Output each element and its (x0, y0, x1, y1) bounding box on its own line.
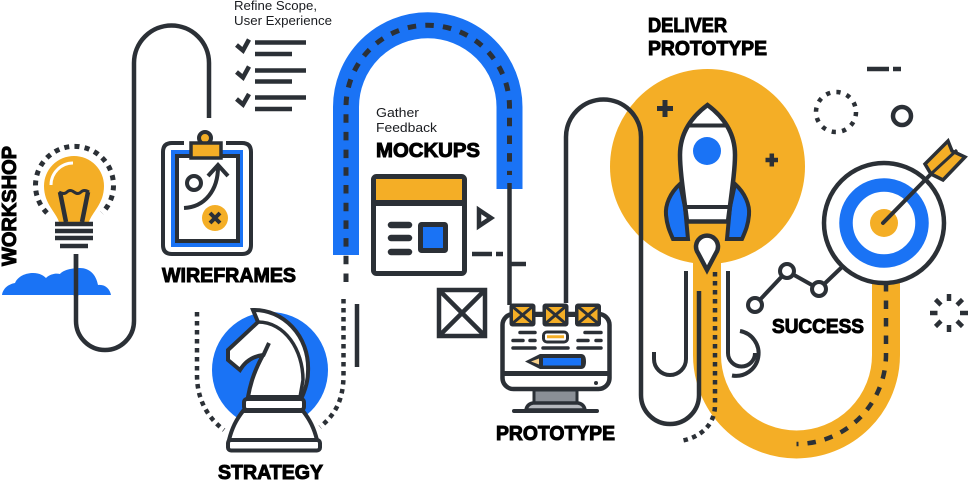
bulb glass (44, 156, 104, 222)
stand foot (526, 403, 585, 410)
filament top (59, 190, 89, 194)
blue arch road (346, 25, 510, 255)
clipboard frame (163, 143, 251, 254)
dotted circle (816, 92, 856, 132)
deliver prototype label: DELIVER (648, 15, 728, 37)
text lines (391, 225, 409, 252)
orange U-shaped road (707, 255, 886, 444)
mockups label: MOCKUPS (376, 140, 480, 162)
blue backing (171, 150, 243, 247)
arrow shaft (883, 175, 930, 223)
outer ring (824, 163, 944, 283)
icon: browser window (373, 176, 465, 274)
plus small (766, 154, 778, 166)
icon: monitor (501, 304, 611, 411)
x mark (210, 213, 220, 223)
clip loop (199, 132, 211, 144)
cone and band lines (685, 126, 730, 207)
x tile two (542, 304, 568, 326)
window frame (374, 176, 464, 274)
play circle (187, 176, 201, 190)
bullseye (870, 209, 898, 237)
icon: lightbulb on cloud (2, 146, 114, 296)
success label: SUCCESS (772, 316, 864, 338)
power dot (594, 381, 598, 385)
dash marks top right (867, 67, 901, 71)
blue circle (212, 312, 328, 428)
deliver prototype label: PROTOTYPE (648, 38, 767, 60)
text rows (513, 332, 601, 348)
wireframes label: WIREFRAMES (162, 265, 296, 287)
paper (177, 156, 238, 241)
connector: workshop to wireframes (76, 26, 209, 350)
hook left (654, 271, 686, 375)
screen (502, 314, 610, 389)
hook right (728, 271, 755, 366)
pencil tip (531, 358, 539, 364)
right fin (727, 184, 749, 239)
fletching line (932, 150, 957, 173)
porthole (693, 137, 721, 165)
gather feedback text (376, 105, 438, 135)
small ring (893, 107, 911, 125)
bulb highlight (51, 163, 73, 185)
clip (191, 143, 221, 158)
icon: target with arrow (824, 141, 965, 283)
connector to monitor (510, 183, 526, 305)
icon: rocket (666, 105, 749, 270)
left fin (666, 184, 688, 239)
header rule (373, 200, 465, 206)
dotted halo (35, 146, 113, 213)
cloud (2, 268, 111, 295)
dotted arc right (320, 299, 344, 427)
gather feedback text: Feedback (376, 120, 438, 135)
bezel rule (501, 371, 611, 376)
orange marker (202, 205, 228, 231)
growth line chart (748, 264, 842, 312)
s-curve connector (566, 100, 699, 424)
foot line (514, 409, 597, 413)
deliver prototype label (648, 15, 767, 60)
blue square (420, 224, 446, 250)
dotted trail (680, 272, 715, 441)
image placeholder box (439, 290, 485, 336)
arch dashes (346, 25, 510, 282)
vertical bar (355, 304, 359, 367)
play triangle (479, 210, 491, 226)
arrow fletching (925, 141, 965, 180)
neck tip (263, 343, 269, 356)
hook outer arc (732, 331, 759, 376)
prototype label: PROTOTYPE (496, 423, 615, 445)
sunburst (930, 294, 968, 332)
flame (696, 236, 718, 270)
mane line (258, 322, 303, 397)
rocket body (680, 105, 735, 222)
refine scope text: User Experience (234, 13, 332, 28)
bulb base (55, 224, 93, 246)
window header (376, 179, 462, 200)
knight body (228, 310, 308, 397)
icon: chess knight (212, 310, 328, 450)
gather feedback text: Gather (376, 105, 420, 120)
dome (229, 411, 317, 440)
orange circle behind rocket (610, 69, 805, 264)
pencil body (543, 358, 581, 366)
plus large (657, 100, 673, 117)
dash marks (472, 252, 503, 256)
refine scope text (234, 0, 332, 28)
checklist (236, 40, 306, 109)
base (228, 440, 320, 450)
play arrow (184, 165, 228, 208)
link bar (520, 313, 590, 317)
filament (60, 192, 88, 222)
dotted arc left (197, 312, 224, 430)
x tile one (510, 304, 536, 326)
cloud stem (74, 254, 78, 296)
icon: clipboard (163, 132, 251, 254)
stand (534, 390, 577, 403)
blue ring (846, 185, 922, 261)
button line (547, 335, 564, 338)
collar (244, 399, 304, 410)
centre button (544, 332, 568, 342)
road dashes (796, 283, 886, 444)
pencil (525, 354, 586, 369)
x tile three (575, 304, 601, 326)
